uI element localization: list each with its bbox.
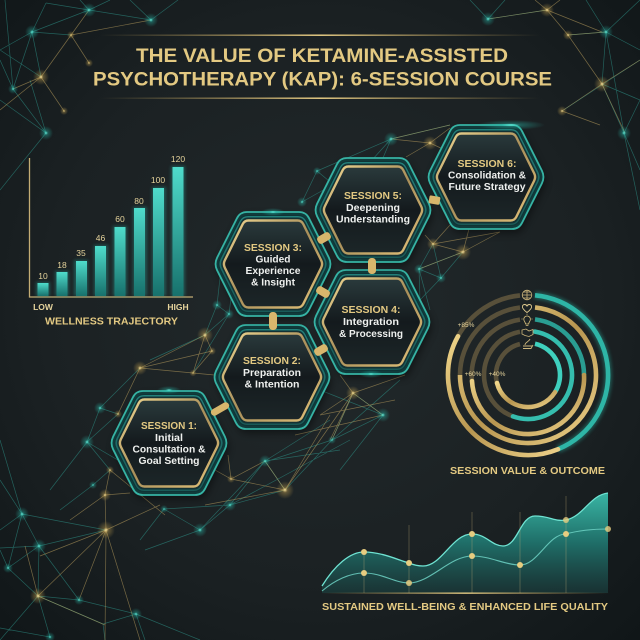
chart title: WELLNESS TRAJECTORY: [45, 316, 178, 328]
icon: light bulb: [522, 314, 532, 326]
session 1 text: Initial: [155, 432, 183, 444]
session 1 text: [132, 420, 206, 467]
session 4 text: SESSION 4:: [342, 304, 400, 316]
session 5 text: [336, 190, 410, 226]
bar values: 18: [57, 260, 67, 270]
session 2 text: [243, 355, 301, 390]
connector: session 2 to 3: [269, 312, 277, 330]
session 4 hexagon: [315, 270, 431, 378]
session 3 text: [244, 242, 302, 288]
ring 4 teal: [513, 332, 572, 419]
session 1 text: SESSION 1:: [141, 420, 197, 432]
grid drop lines: [364, 496, 566, 593]
percentage labels: +40%: [489, 371, 506, 378]
axis label low: LOW: [33, 302, 54, 312]
bar values: [38, 154, 185, 281]
session 4 text: & Processing: [339, 328, 403, 340]
session 1 text: Goal Setting: [138, 455, 200, 467]
session 3 text: SESSION 3:: [244, 242, 302, 254]
session 2 text: & Intention: [244, 378, 300, 390]
session 6 hexagon: [429, 120, 545, 233]
area fill: [322, 493, 608, 593]
bar values: 35: [76, 248, 86, 258]
session 5 text: Deepening: [346, 202, 400, 214]
ring 5 teal: [535, 344, 560, 392]
icon: hand with plant: [523, 339, 533, 348]
ring 3 gold: [472, 375, 584, 434]
ring 1 gold: [448, 336, 558, 455]
session 5 text: Understanding: [336, 214, 410, 226]
percentage labels: +85%: [458, 322, 475, 329]
bar values: 60: [115, 214, 125, 224]
session 3 text: Experience: [246, 265, 301, 277]
session 2 hexagon: [215, 325, 331, 433]
ring 3 teal: [535, 319, 584, 375]
session 1 text: Consultation &: [132, 444, 206, 456]
percentage labels: [458, 322, 506, 378]
session 3 text: Guided: [256, 254, 290, 266]
upper curve: [322, 493, 608, 586]
area chart: sustained well-being: [322, 493, 611, 613]
title line 2: PSYCHOTHERAPY (KAP): 6-SESSION COURSE: [93, 68, 552, 90]
session 3 hexagon: [216, 208, 332, 320]
data points: [361, 517, 611, 586]
connector: session 5 to 6: [428, 195, 441, 205]
title line 1: THE VALUE OF KETAMINE-ASSISTED: [136, 45, 508, 67]
ring 2 gold: [460, 307, 596, 443]
bar chart: wellness trajectory: [30, 154, 193, 328]
ring 5 gold: [497, 383, 555, 407]
bar values: 120: [171, 154, 185, 164]
session 3 text: & Insight: [251, 276, 295, 288]
bar values: 80: [134, 196, 144, 206]
area chart title: SUSTAINED WELL-BEING & ENHANCED LIFE QUALITY: [322, 601, 608, 613]
icon: heart: [522, 304, 532, 312]
session 5 hexagon: [316, 158, 432, 266]
bar values: 46: [96, 233, 105, 243]
session 6 text: Consolidation &: [448, 170, 526, 182]
ring 1 teal: [535, 295, 608, 449]
icon: handshake: [522, 329, 533, 336]
faded ring tracks: [458, 295, 520, 416]
teal glow: [535, 295, 608, 449]
session 5 text: SESSION 5:: [344, 190, 402, 202]
session 2 text: SESSION 2:: [243, 355, 301, 367]
percentage labels: +60%: [465, 371, 482, 378]
connector: session 2 to 4: [313, 343, 329, 357]
radial chart: session value and outcome: [448, 290, 608, 455]
session 4 text: [339, 304, 403, 340]
icon: brain globe: [522, 290, 532, 300]
title block: [93, 34, 552, 99]
connector: session 4 to 5: [368, 258, 376, 274]
lower curve: [322, 529, 608, 591]
session 6 text: Future Strategy: [448, 181, 526, 193]
bar values: 10: [38, 271, 48, 281]
session 6 text: SESSION 6:: [458, 158, 516, 170]
session 6 text: [448, 158, 526, 193]
connector: session 3 to 5: [316, 231, 332, 245]
session 2 text: Preparation: [243, 367, 301, 379]
axis label high: HIGH: [167, 302, 189, 312]
radial chart title: SESSION VALUE & OUTCOME: [450, 465, 605, 477]
connector: session 3 to 4: [315, 285, 331, 299]
session 1 hexagon: [112, 386, 228, 499]
connector: session 1 to 2: [210, 401, 230, 417]
bar values: 100: [151, 175, 165, 185]
session 4 text: Integration: [343, 316, 399, 328]
